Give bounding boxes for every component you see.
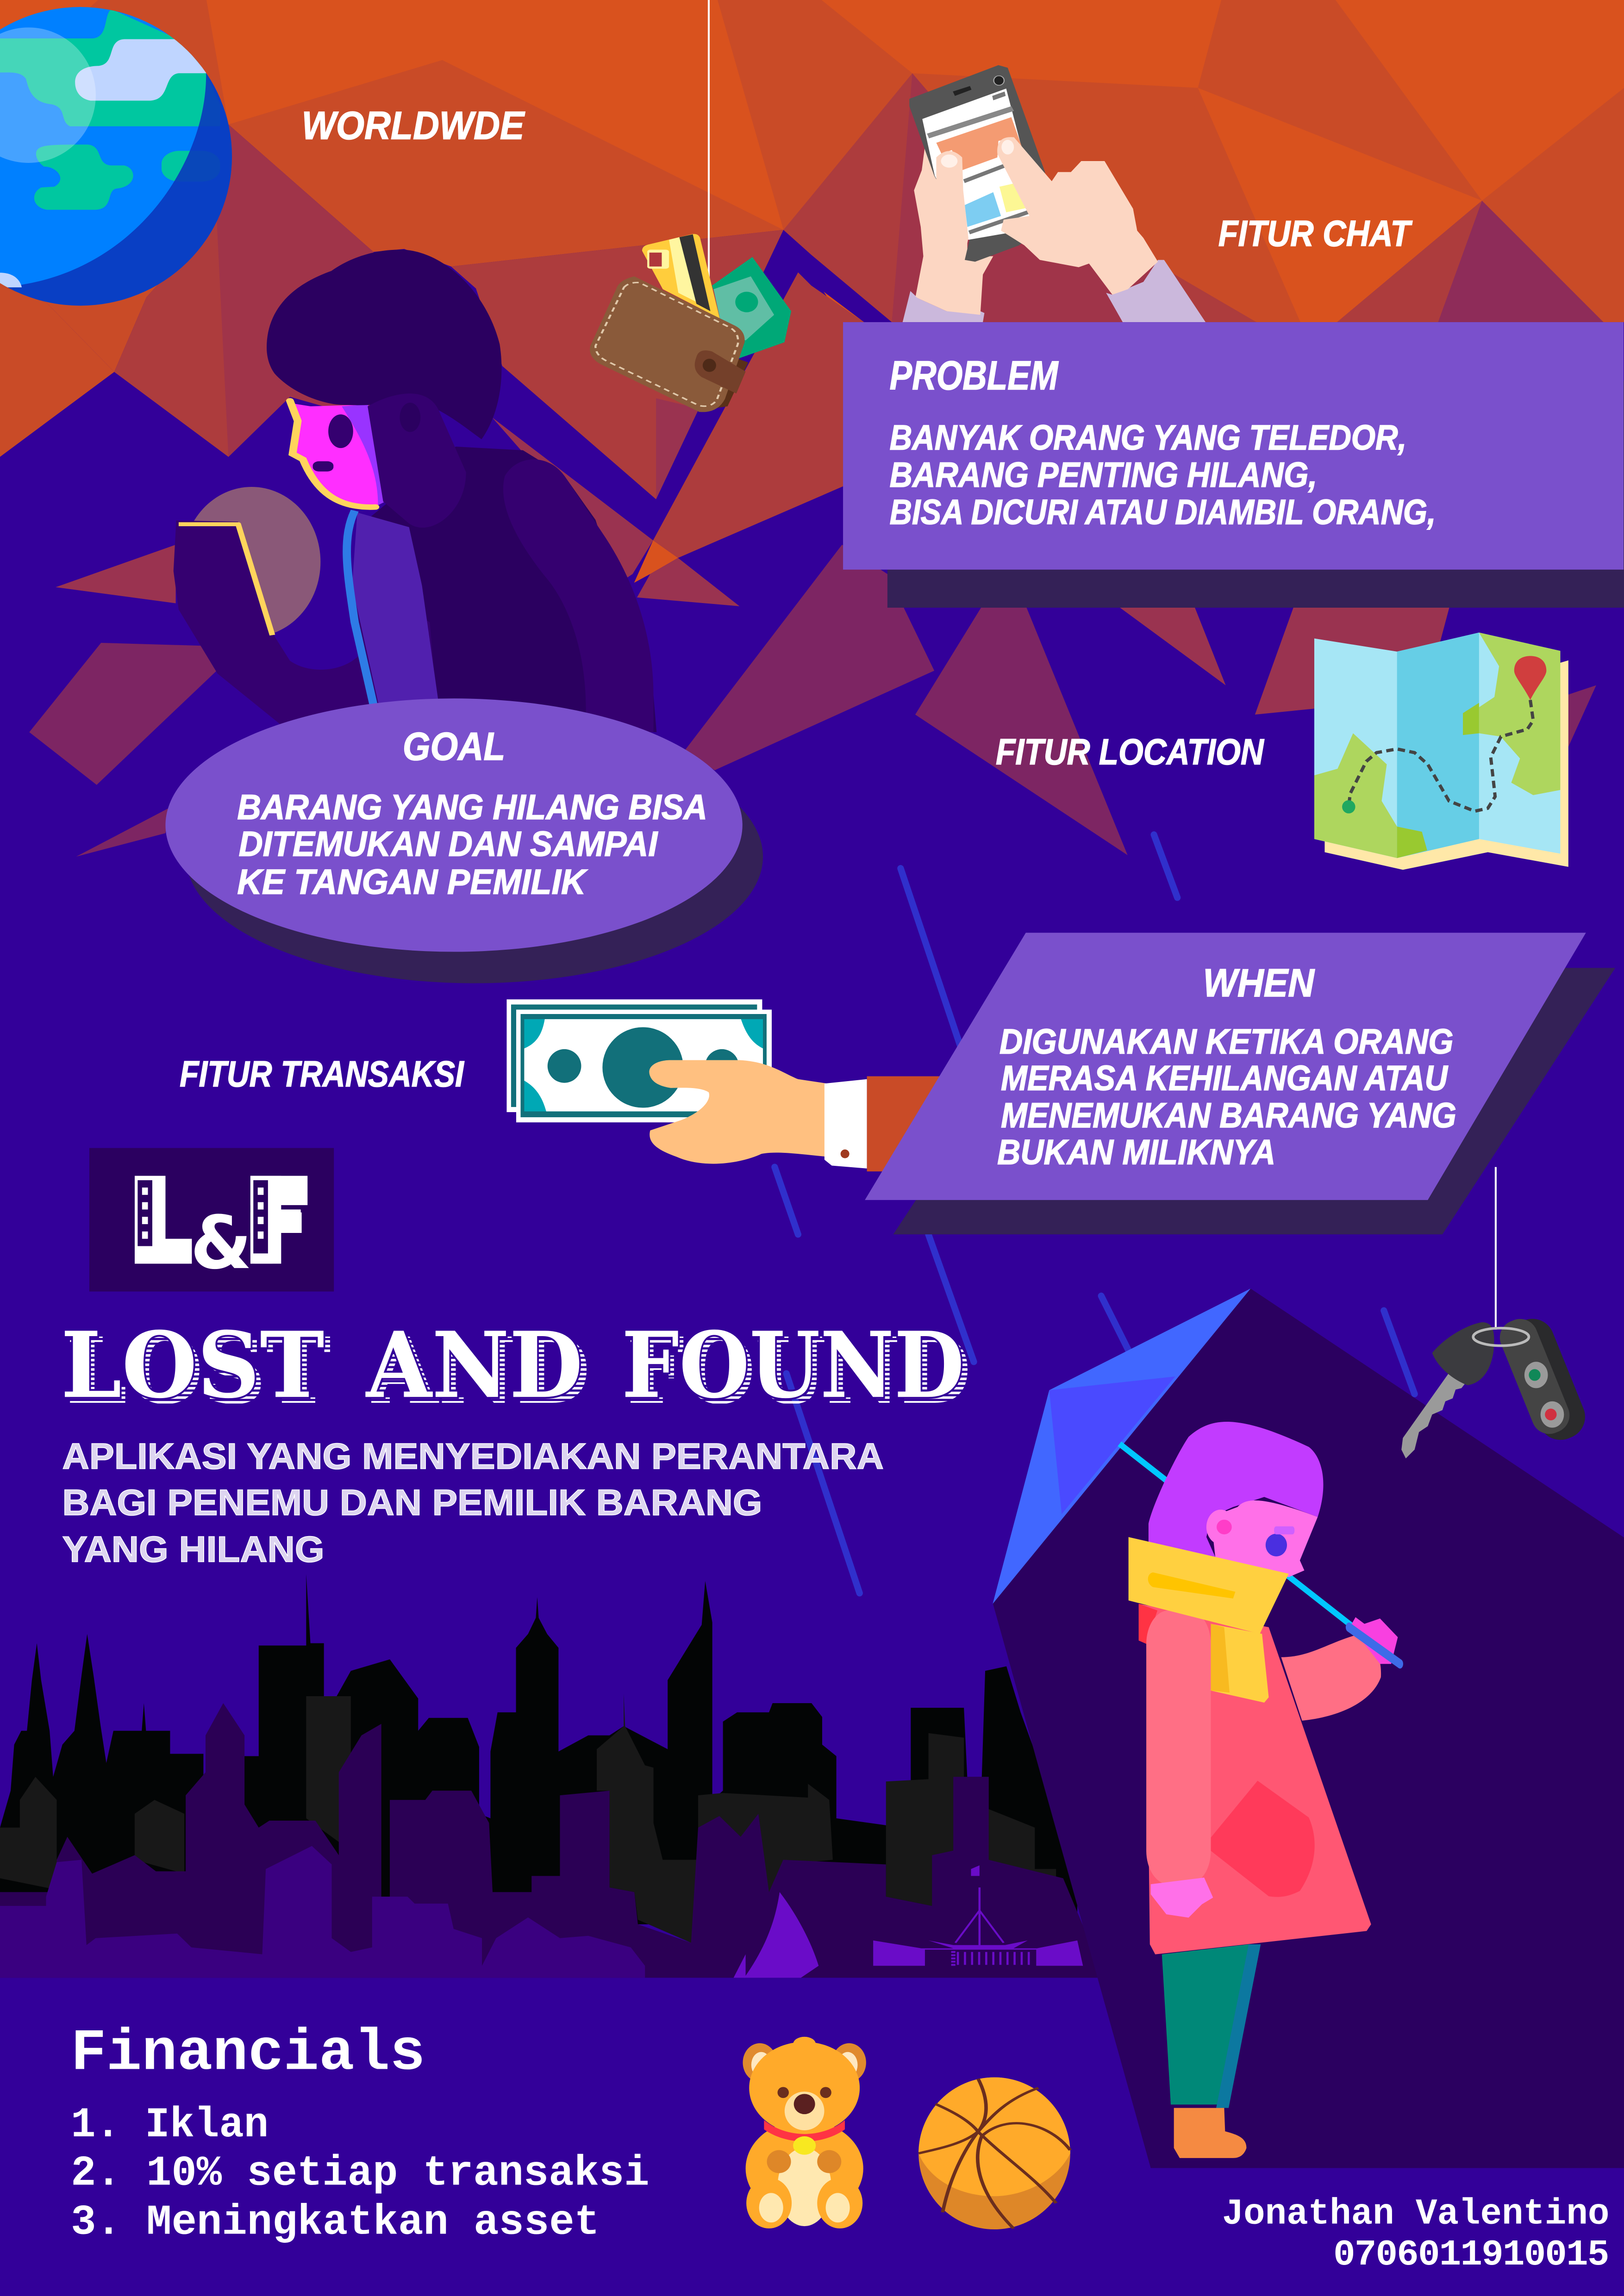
low-poly orange backdrop	[0, 0, 1624, 857]
author credit: 0706011910015	[1333, 2234, 1609, 2276]
problem text: BARANG PENTING HILANG,	[890, 455, 1317, 495]
logo: L&F: L	[132, 1152, 192, 1292]
illustration: woman with umbrella	[1129, 1422, 1400, 2158]
label: worldwide: WORLDWDE	[302, 104, 525, 148]
goal text: BARANG YANG HILANG BISA	[237, 788, 707, 827]
illustration: umbrella	[993, 1288, 1353, 1627]
illustration: hands holding phone	[903, 65, 1206, 322]
title: FOUND	[627, 1318, 971, 1425]
subtitle: YANG HILANG	[62, 1528, 325, 1569]
financials list: 3. Meningkatkan asset	[71, 2199, 600, 2247]
goal heading: GOAL	[403, 725, 505, 769]
title: FOUND	[622, 1312, 964, 1419]
goal text: KE TANGAN PEMILIK	[237, 863, 588, 902]
label: fitur chat: FITUR CHAT	[1218, 213, 1412, 254]
label: fitur location: FITUR LOCATION	[996, 731, 1264, 772]
rain streaks	[775, 834, 1415, 1593]
when text: BUKAN MILIKNYA	[997, 1132, 1275, 1172]
when text: DIGUNAKAN KETIKA ORANG	[999, 1022, 1453, 1061]
logo: L&F	[89, 1148, 334, 1292]
panel: problem	[843, 322, 1624, 608]
title: AND	[365, 1312, 583, 1419]
logo: L&F: &	[190, 1201, 252, 1286]
goal text	[237, 788, 707, 902]
dark backdrop behind woman	[993, 1288, 1624, 2168]
string holding keys	[1495, 1167, 1496, 1330]
author credit: Jonathan Valentino	[1222, 2193, 1609, 2234]
title: LOST	[66, 1318, 331, 1425]
when text: MENEMUKAN BARANG YANG	[1001, 1096, 1456, 1135]
subtitle: APLIKASI YANG MENYEDIAKAN PERANTARA	[62, 1435, 884, 1476]
problem heading: PROBLEM	[890, 353, 1059, 398]
author credit	[1222, 2193, 1609, 2276]
city skyline	[0, 1574, 1099, 1978]
icon: teddy bear	[743, 2037, 866, 2228]
illustration: person looking at tablet	[174, 249, 656, 732]
when text: MERASA KEHILANGAN ATAU	[1001, 1059, 1449, 1098]
illustration: hand with banknotes	[506, 999, 967, 1171]
when text	[997, 1022, 1456, 1172]
goal text: DITEMUKAN DAN SAMPAI	[239, 824, 658, 864]
subtitle: BAGI PENEMU DAN PEMILIK BARANG	[62, 1482, 762, 1523]
title: AND	[371, 1318, 590, 1425]
icon: basketball	[918, 2077, 1070, 2229]
financials list	[71, 2101, 650, 2247]
problem text: BISA DICURI ATAU DIAMBIL ORANG,	[890, 493, 1436, 532]
when heading: WHEN	[1203, 961, 1315, 1005]
panel: when	[865, 933, 1615, 1234]
financials heading: Financials	[71, 2021, 425, 2087]
logo: L&F: F	[246, 1152, 311, 1292]
financials list: 2. 10% setiap transaksi	[71, 2150, 650, 2198]
subtitle	[62, 1435, 884, 1569]
string holding wallet	[708, 0, 709, 278]
icon: wallet with card and cash	[590, 234, 791, 412]
icon: folded map	[1314, 633, 1568, 870]
label: fitur transaksi: FITUR TRANSAKSI	[180, 1053, 465, 1095]
panel: goal	[165, 698, 763, 983]
problem text: BANYAK ORANG YANG TELEDOR,	[890, 418, 1406, 457]
icon: car keys	[1401, 1312, 1592, 1458]
problem text	[890, 418, 1436, 532]
title: LOST	[61, 1312, 325, 1419]
title	[61, 1312, 971, 1425]
globe illustration	[0, 0, 244, 315]
financials list: 1. Iklan	[71, 2101, 269, 2149]
